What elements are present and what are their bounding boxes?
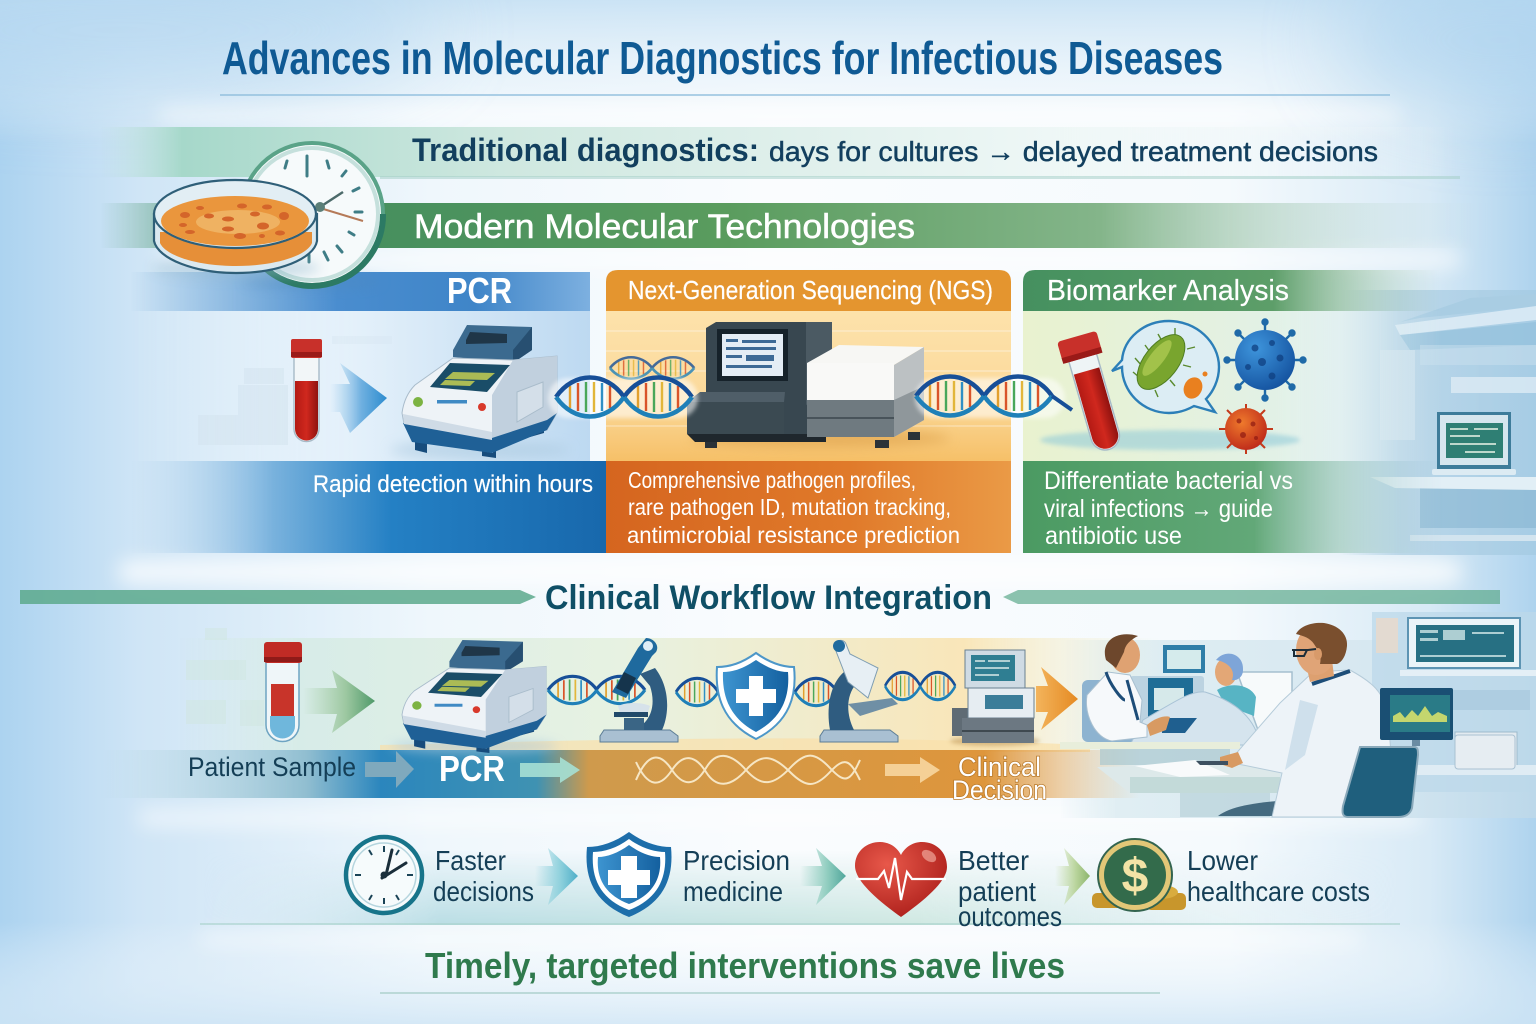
- sequencer machine: [687, 322, 950, 448]
- PCR header: PCR: [447, 270, 512, 311]
- icon: heart: [855, 842, 947, 917]
- icon: microscope left: [600, 638, 678, 742]
- label: lower healthcare costs: Lower: [1187, 845, 1258, 876]
- label: Clinical Decision: Clinical: [958, 752, 1041, 782]
- icon: blood tube: [291, 339, 322, 442]
- arrow: PCR to sequencing: [520, 757, 580, 783]
- desk: [1060, 742, 1280, 817]
- background: laboratory, upper right: [1340, 290, 1536, 555]
- banner: modern molecular technologies: [100, 203, 1490, 248]
- DNA helix: workflow left: [548, 676, 645, 704]
- small DNA helix: [610, 357, 694, 379]
- faded lab backdrop: [198, 336, 392, 445]
- icon: dollar coin: [1092, 839, 1186, 911]
- banner: modern molecular technologies: Modern Molecular Technologies: [414, 208, 915, 246]
- icon: red virus: [1219, 404, 1273, 454]
- icon: blue virus: [1224, 320, 1306, 400]
- icon: tilted blood tube: [1057, 331, 1129, 455]
- label: precision medicine: Precision: [683, 845, 790, 876]
- panel: clinical workflow strip: [100, 628, 1160, 798]
- DNA helix: workflow right of shield: [795, 678, 837, 706]
- icon: analyzer: [950, 650, 1040, 746]
- icon: petri dish: [152, 180, 320, 278]
- label: better patient outcomes: Better: [958, 845, 1029, 876]
- tablet: [1161, 718, 1197, 733]
- label: better patient outcomes: patient: [958, 876, 1036, 907]
- arrow: [800, 848, 846, 905]
- PCR machine, workflow: [391, 640, 558, 754]
- speech bubble with bacterium: [1112, 321, 1219, 413]
- DNA helix: NGS to Biomarker: [915, 376, 1072, 418]
- arrow: sample label to PCR: [365, 751, 414, 788]
- blanket: [1130, 692, 1260, 745]
- DNA motif on orange band: [636, 756, 860, 784]
- Biomarker caption: viral infections → guide: [1044, 495, 1273, 523]
- label: precision medicine: [683, 845, 790, 907]
- PCR caption: Rapid detection within hours: [313, 471, 593, 498]
- NGS caption: antimicrobial resistance prediction: [627, 522, 960, 548]
- label: lower healthcare costs: healthcare costs: [1187, 876, 1370, 907]
- background: laboratory, lower right: [1372, 612, 1536, 792]
- banner: traditional diagnostics: Traditional diagnostics:: [412, 132, 759, 168]
- chair: [1343, 747, 1418, 817]
- panel: PCR: [130, 270, 606, 553]
- label: faster decisions: Faster: [435, 845, 506, 876]
- icon: shield: [586, 832, 672, 917]
- PCR machine: [390, 325, 570, 459]
- icon: shield with cross: [717, 653, 795, 739]
- label: Clinical Decision: Decision: [952, 775, 1047, 805]
- flow band: [100, 750, 1140, 798]
- NGS caption: [606, 461, 1011, 553]
- heading: Clinical Workflow Integration: Clinical Workflow Integration: [545, 579, 992, 617]
- label: lower healthcare costs: [1187, 845, 1370, 907]
- Biomarker caption: antibiotic use: [1045, 522, 1182, 550]
- banner: traditional diagnostics: days for cultures → delayed treatment decisions: [769, 136, 1378, 167]
- NGS header: Next-Generation Sequencing (NGS): [628, 275, 993, 305]
- lower cabinet: [1455, 735, 1515, 769]
- PCR caption: [130, 461, 606, 553]
- label: faster decisions: decisions: [433, 876, 534, 907]
- label: PCR: PCR: [439, 748, 505, 789]
- closing message: Timely, targeted interventions save lives: [425, 945, 1065, 986]
- arrow: orange to clinical scene: [1036, 667, 1078, 730]
- arrow: [1055, 848, 1090, 905]
- background: clinical scene backdrop: [1060, 640, 1536, 818]
- arrow: tube to PCR machine: [330, 363, 387, 433]
- label: faster decisions: [433, 845, 534, 907]
- NGS caption: rare pathogen ID, mutation tracking,: [628, 494, 951, 520]
- label: precision medicine: medicine: [683, 876, 783, 907]
- PCR header: [130, 270, 590, 311]
- icon: laptop, upper right: [1432, 412, 1516, 475]
- label: Clinical Decision: [952, 752, 1047, 805]
- patient: [1215, 654, 1256, 716]
- Biomarker caption: Differentiate bacterial vs: [1044, 467, 1293, 495]
- icon: clock: [346, 837, 422, 913]
- arrow: sample to PCR: [303, 670, 375, 733]
- banner: traditional diagnostics: [100, 127, 1460, 179]
- monitor: [1380, 688, 1453, 746]
- clinical scene: bedside and desk: [1060, 623, 1515, 817]
- DNA helix: workflow centre: [676, 678, 718, 706]
- panel: Next-Generation Sequencing: [606, 270, 1011, 553]
- DNA helix: workflow to analyzer: [885, 672, 955, 700]
- Biomarker caption: [1023, 461, 1443, 553]
- arrow: [535, 848, 578, 905]
- label: Patient Sample: Patient Sample: [188, 752, 356, 782]
- icon: clock behind petri dish: [241, 143, 383, 288]
- icon: dollar coin: $: [1122, 850, 1149, 903]
- Biomarker header: Biomarker Analysis: [1047, 275, 1289, 307]
- DNA helix: PCR to NGS: [548, 378, 698, 418]
- panel: Biomarker Analysis: [1023, 270, 1443, 553]
- NGS header: [606, 270, 1011, 311]
- panel: outcomes strip: [200, 832, 1400, 932]
- Biomarker header: [1023, 270, 1440, 311]
- arrow: sequencing to decision: [885, 757, 940, 783]
- icon: microscope right: [820, 640, 898, 742]
- icon: patient sample tube: [264, 642, 302, 742]
- doctor right: [1196, 623, 1392, 817]
- heading: Clinical Workflow Integration: [20, 579, 1500, 617]
- bed head and equipment: [1082, 645, 1292, 742]
- doctor left: [1087, 634, 1170, 741]
- faded backdrop squares: [186, 628, 264, 726]
- title: Advances in Molecular Diagnostics for Infectious Diseases: [222, 32, 1223, 84]
- label: better patient outcomes: [958, 845, 1062, 932]
- NGS caption: Comprehensive pathogen profiles,: [628, 467, 916, 493]
- label: better patient outcomes: outcomes: [958, 901, 1062, 932]
